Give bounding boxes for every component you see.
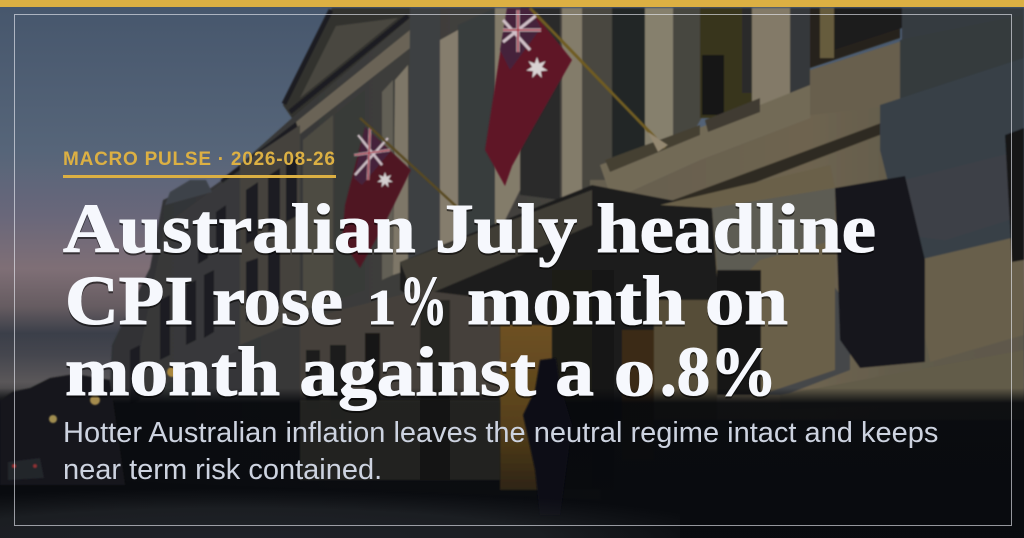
- flagpole small: [360, 118, 458, 208]
- headline: month against a: [65, 334, 594, 411]
- bottom shade: [0, 388, 1024, 538]
- subtitle: Hotter Australian inflation leaves the neutral regime intact and keeps: [63, 417, 938, 449]
- large flag: [485, 8, 668, 186]
- columns right: [562, 8, 582, 198]
- pediment dentils: [222, 10, 408, 182]
- wing windows: [130, 156, 297, 405]
- right wall: [590, 40, 1024, 420]
- door canopy: [400, 185, 725, 420]
- pediment shadow: [283, 8, 420, 118]
- street lights: [49, 367, 177, 423]
- dim lower facade: [300, 400, 500, 480]
- headline: 0: [614, 350, 655, 406]
- star small: [377, 172, 393, 187]
- headline: %: [400, 263, 447, 340]
- union jack: [500, 8, 541, 70]
- window beside door: [717, 270, 761, 395]
- star: [526, 57, 548, 78]
- trees on the street: [0, 374, 125, 485]
- top accent bar: [0, 0, 1024, 7]
- headline: Australian July headline: [63, 191, 876, 268]
- headline: 1: [367, 279, 396, 335]
- cornice band: [600, 85, 810, 200]
- flagpole: [530, 8, 665, 148]
- street surface: [0, 472, 680, 538]
- kicker label: MACRO PULSE · 2026-08-26: [63, 149, 336, 170]
- kicker label: [63, 148, 336, 178]
- headline: month on: [467, 263, 788, 340]
- doorway glow: [500, 325, 552, 490]
- lower stone wall: [300, 290, 500, 470]
- upper wall lit patch under canopy: [660, 165, 835, 395]
- car on the street: [8, 458, 44, 480]
- headline: .8%: [660, 334, 777, 411]
- guard silhouette at door: [523, 358, 572, 515]
- small flag: [342, 118, 458, 268]
- subtitle: near term risk contained.: [63, 454, 382, 486]
- large dark window: [835, 176, 925, 368]
- far wing of building: [105, 8, 600, 500]
- headline: CPI rose: [65, 263, 343, 340]
- union jack small: [354, 127, 390, 185]
- central columns: [408, 8, 440, 270]
- subtitle: [63, 417, 938, 486]
- doorway: [552, 270, 592, 490]
- door post shade: [420, 400, 450, 480]
- blue shadow on wall: [880, 58, 1024, 270]
